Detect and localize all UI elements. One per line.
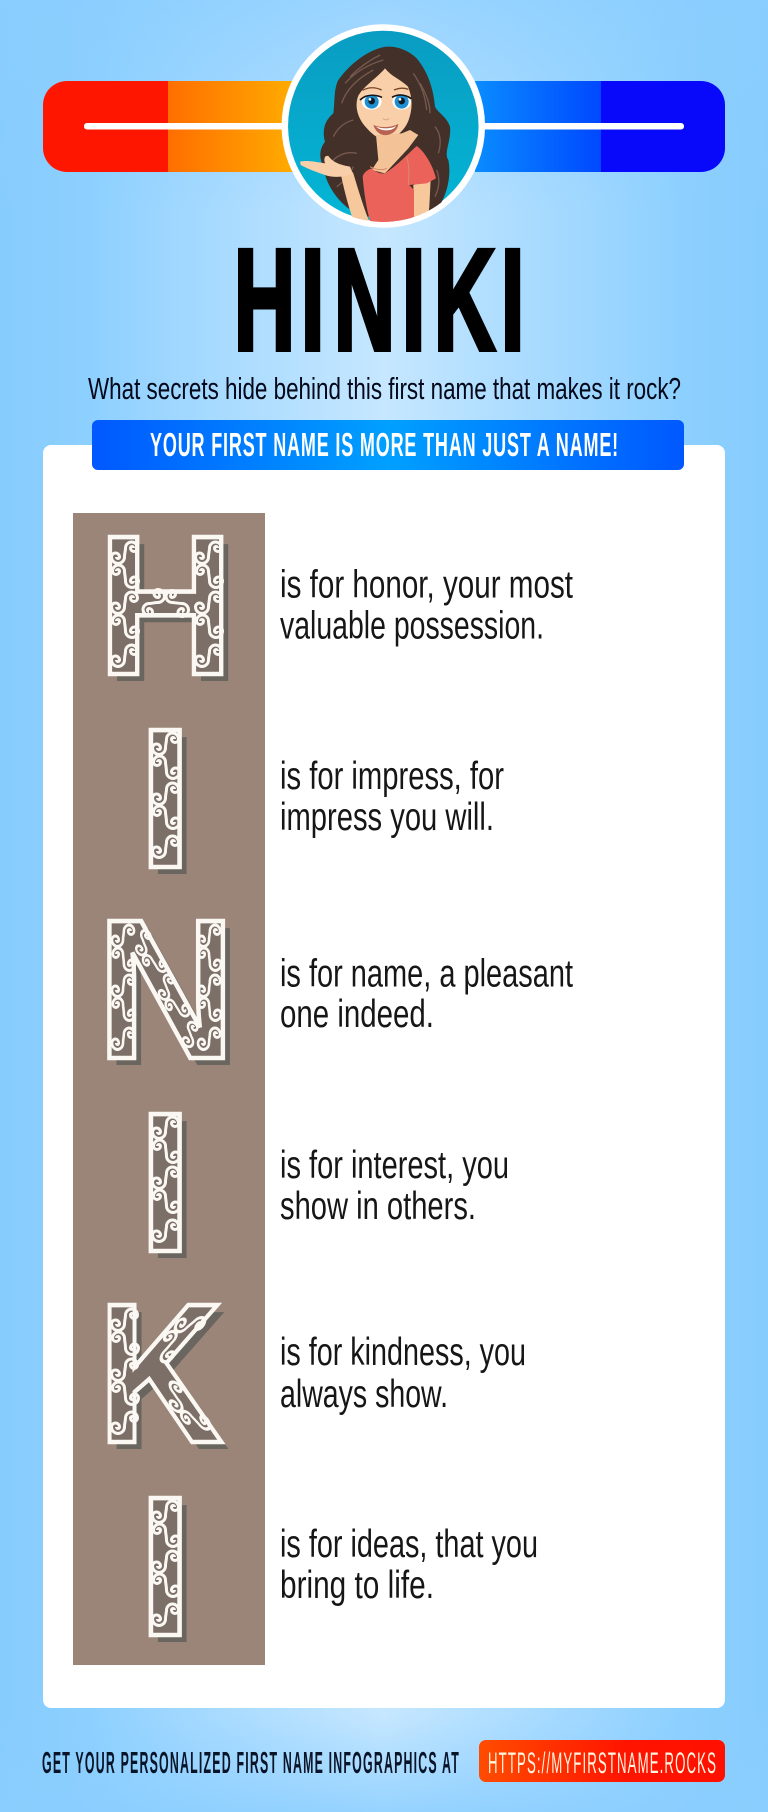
letter K: K (98, 1262, 223, 1485)
text block: name: is for name, a pleasant (280, 953, 573, 996)
text block: kindness (280, 1331, 526, 1416)
brown letter column (73, 495, 265, 1685)
letter N: N (96, 878, 236, 1101)
letter I (impress): I (145, 695, 200, 917)
letter I (impress): I (138, 688, 193, 910)
letter I (ideas): I (145, 1463, 200, 1685)
portrait: cartoon woman in circle (285, 28, 482, 224)
text block: impress: impress you will. (280, 796, 494, 839)
text block: honor (280, 564, 573, 647)
letter N: N (104, 885, 243, 1108)
text block: name (280, 953, 573, 1036)
letter I (interest): I (138, 1072, 193, 1294)
header ribbon bar (43, 81, 725, 172)
title: name: HINIKI (234, 220, 524, 381)
letter H: H (97, 495, 234, 717)
text block: kindness: is for kindness, you (280, 1331, 526, 1374)
letter I (interest): I (145, 1079, 200, 1301)
text block: interest: is for interest, you (280, 1144, 509, 1187)
footer URL button (479, 1740, 725, 1782)
text block: honor: valuable possession. (280, 604, 544, 647)
letter K: K (105, 1269, 230, 1492)
panel: white card (43, 445, 725, 1708)
letter H: H (104, 502, 241, 724)
text block: kindness: always show. (280, 1373, 448, 1416)
text block: interest: show in others. (280, 1185, 476, 1228)
text block: ideas: bring to life. (280, 1564, 434, 1607)
text block: impress (280, 755, 504, 839)
text block: honor: is for honor, your most (280, 564, 573, 607)
text block: ideas: is for ideas, that you (280, 1523, 538, 1566)
text block: impress: is for impress, for (280, 755, 504, 798)
text block: ideas (280, 1523, 538, 1607)
letter I (ideas): I (138, 1456, 193, 1678)
banner (92, 420, 684, 470)
text block: name: one indeed. (280, 993, 434, 1036)
text block: interest (280, 1144, 509, 1228)
